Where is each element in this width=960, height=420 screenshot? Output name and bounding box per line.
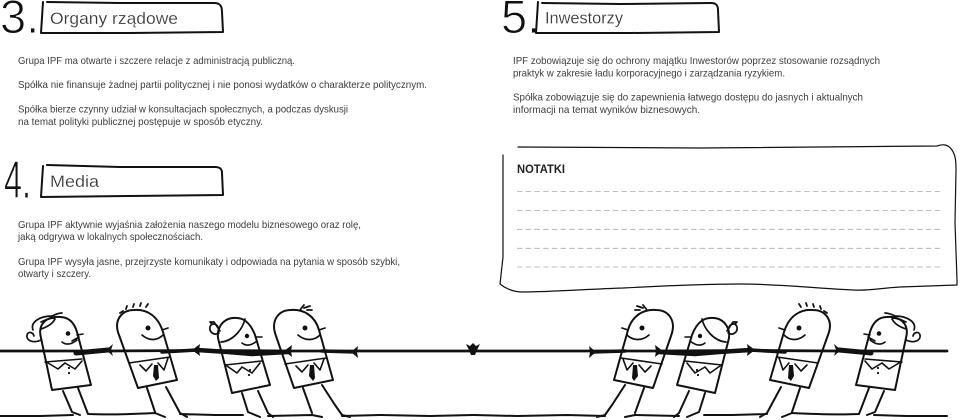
section 4 body text: otwarty i szczery. [18, 268, 91, 280]
notes writing lines [517, 192, 942, 267]
section 4 body text: Grupa IPF wysyła jasne, przejrzyste komunikaty i odpowiada na pytania w sposób szybki, [18, 256, 400, 268]
section 3 body text: Grupa IPF ma otwarte i szczere relacje z administracją publiczną. [18, 55, 295, 67]
section 3 heading: Organy rządowe [50, 9, 178, 28]
notes heading: NOTATKI [517, 164, 565, 176]
section 4 number: 4. [4, 151, 31, 210]
section 5 body text: Spółka zobowiązuje się do zapewnienia łatwego dostępu do jasnych i aktualnych [513, 92, 863, 104]
section 4 body text: Grupa IPF aktywnie wyjaśnia założenia naszego modelu biznesowego oraz rolę, [18, 219, 361, 231]
section 5 body text: IPF zobowiązuje się do ochrony majątku Inwestorów poprzez stosowanie rozsądnych [513, 55, 880, 67]
section 3 body text: na temat polityki publicznej postępuje w sposób etyczny. [18, 116, 263, 128]
section 4 body text: jaką odgrywa w lokalnych społecznościach. [17, 231, 203, 243]
section 4 body text [17, 219, 400, 280]
section 4 heading box [41, 165, 223, 197]
section 3 body text [18, 55, 427, 128]
section 3 heading box [41, 2, 223, 33]
section 4 heading: Media [50, 172, 100, 191]
section 5 heading: Inwestorzy [545, 8, 623, 28]
section 5 body text [513, 55, 880, 116]
panel: notes [500, 145, 957, 292]
section 3 body text: Spółka bierze czynny udział w konsultacjach społecznych, a podczas dyskusji [18, 104, 348, 116]
illustration: tug of war, right team [474, 303, 947, 417]
section 5 body text: praktyk w zakresie ładu korporacyjnego i zarządzania ryzykiem. [513, 68, 785, 80]
rope knot [466, 343, 480, 355]
section 5 body text: informacji na temat wyników biznesowych. [513, 104, 700, 116]
section 3 body text: Spółka nie finansuje żadnej partii politycznej i nie ponosi wydatków o charakterze politycznym. [18, 79, 427, 91]
section 5 heading box [536, 2, 719, 33]
illustration: tug of war, left team [0, 303, 473, 417]
